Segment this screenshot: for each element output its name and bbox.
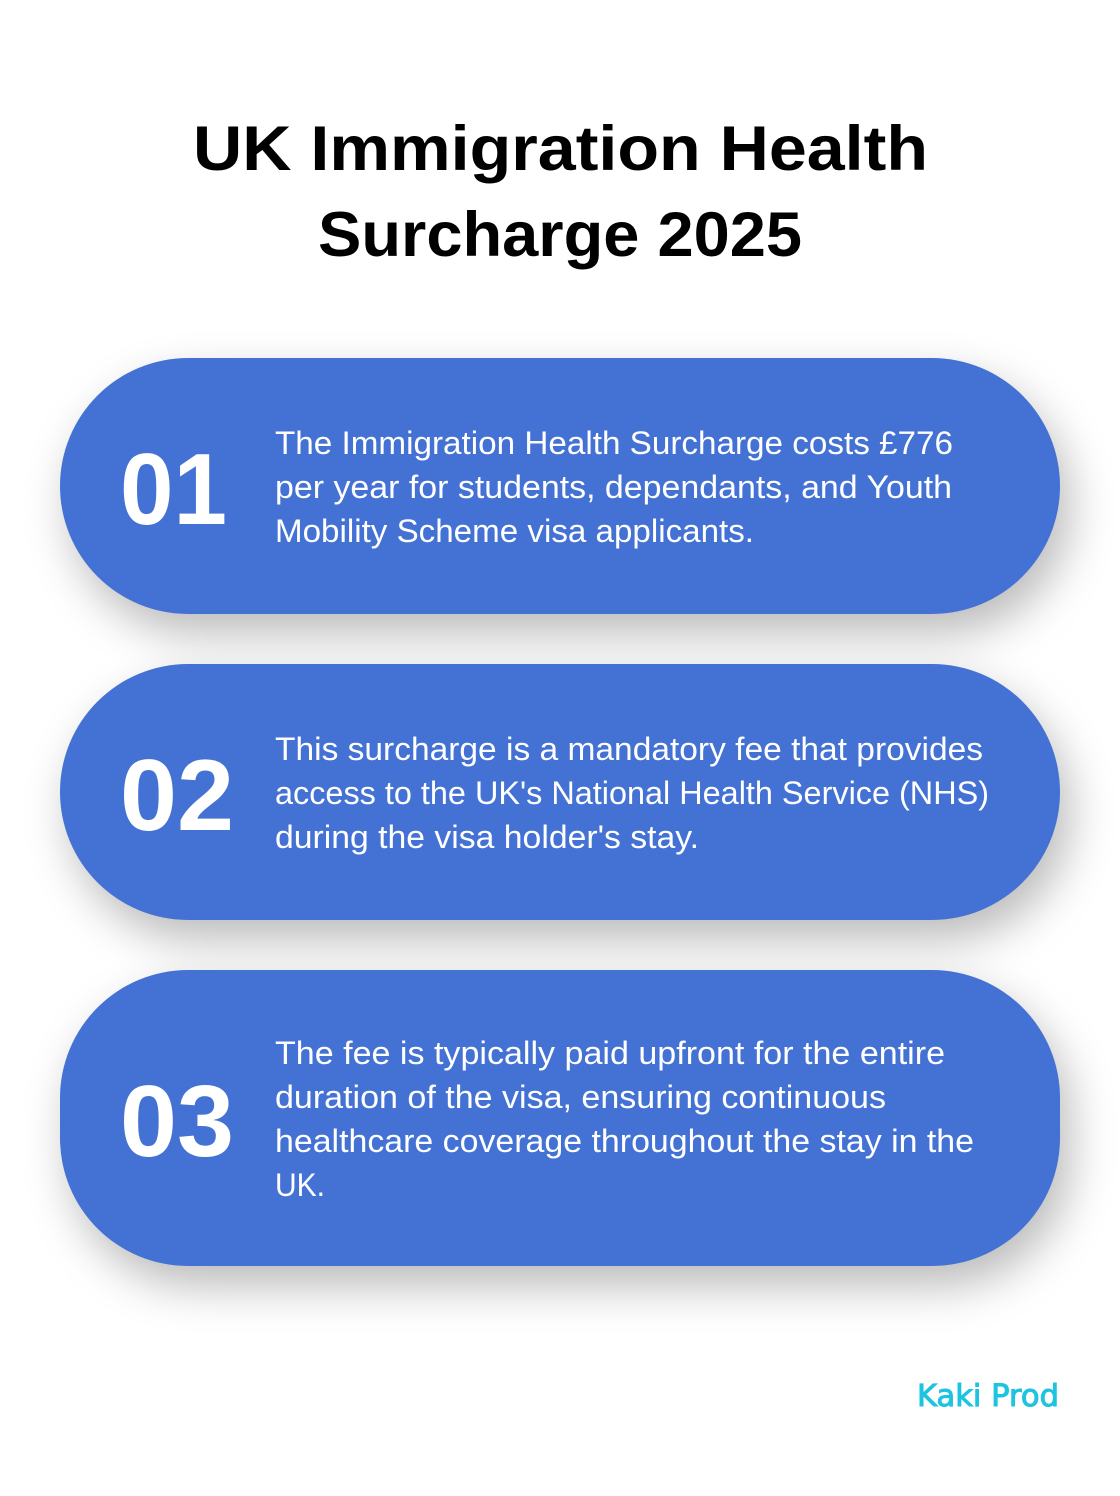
card 2 text: access to the UK's National Health Service (NHS) — [275, 775, 989, 811]
card 3 number: 03 — [120, 1066, 234, 1178]
title: UK Immigration Health — [193, 114, 928, 184]
card 1 text: Mobility Scheme visa applicants. — [275, 513, 754, 549]
card 1 number: 01 — [120, 434, 227, 546]
title: Surcharge 2025 — [318, 200, 802, 270]
card 1 text: per year for students, dependants, and Youth — [275, 469, 952, 505]
card 3 text: UK. — [275, 1167, 325, 1203]
card 2 number: 02 — [120, 740, 234, 852]
card 2 text — [275, 731, 989, 855]
card 3 text — [275, 1035, 974, 1203]
card 2 text: during the visa holder's stay. — [275, 819, 699, 855]
card 3 text: The fee is typically paid upfront for the entire — [275, 1035, 945, 1071]
card 3 text: healthcare coverage throughout the stay in the — [275, 1123, 974, 1159]
panel: card 2 background — [60, 664, 1060, 920]
card 1 text: The Immigration Health Surcharge costs £776 — [275, 425, 953, 461]
logo: Kaki Prod: Kaki Prod — [917, 1379, 1059, 1414]
card 1 text — [275, 425, 953, 549]
panel: card 3 background — [60, 970, 1060, 1266]
card 3 text: duration of the visa, ensuring continuous — [275, 1079, 886, 1115]
panel: card 1 background — [60, 358, 1060, 614]
card 2 text: This surcharge is a mandatory fee that provides — [275, 731, 983, 767]
title — [193, 114, 928, 270]
